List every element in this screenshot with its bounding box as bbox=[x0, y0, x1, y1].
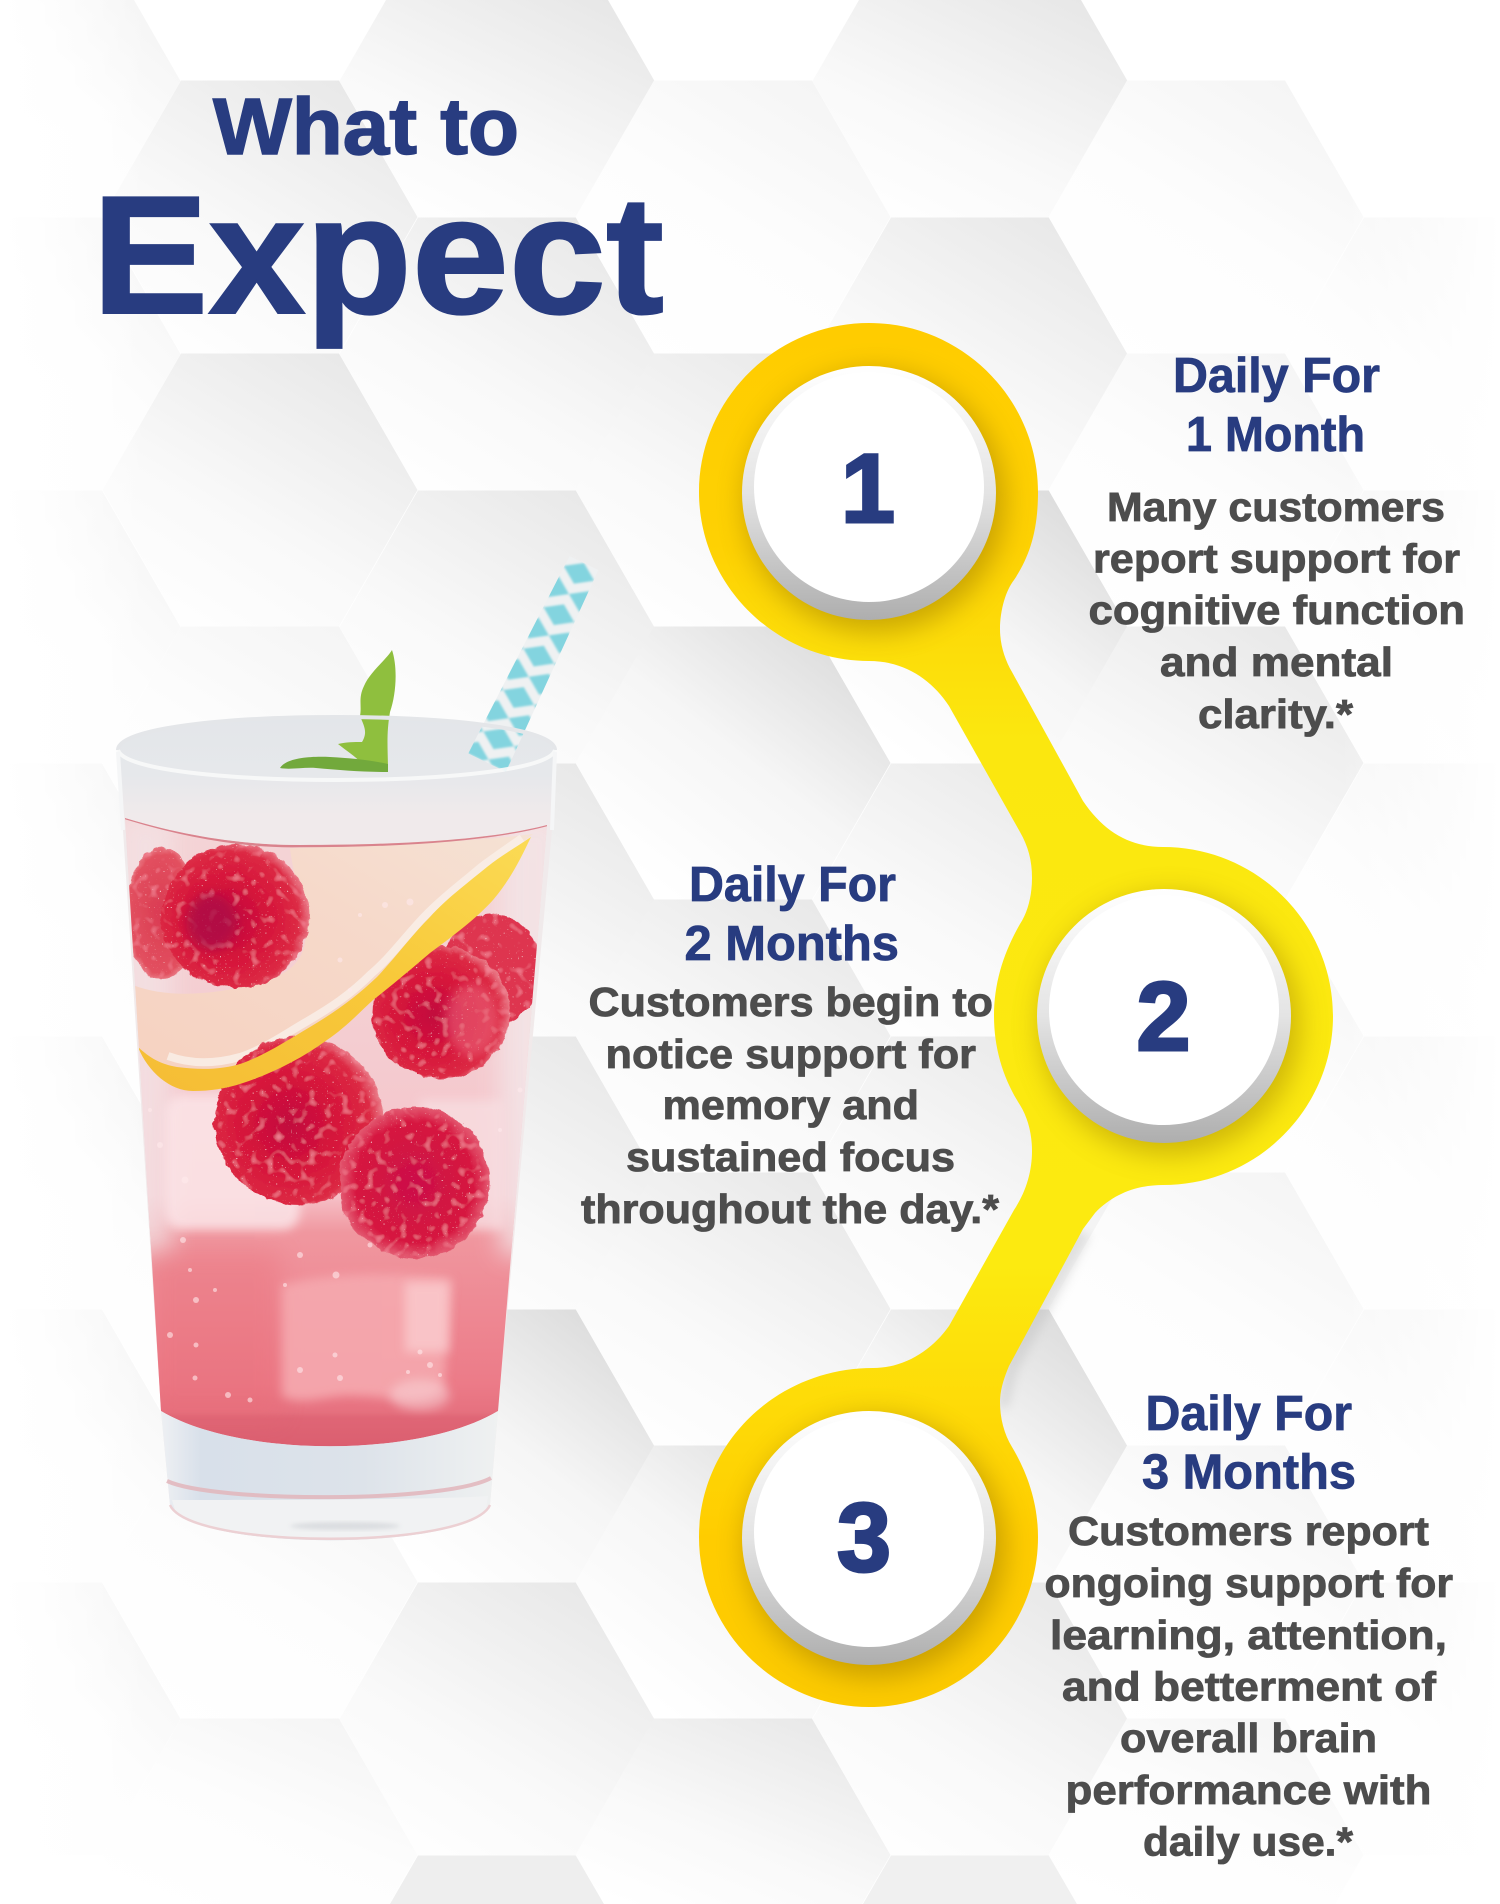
raspberry: back left bbox=[129, 846, 186, 980]
body text: performance with bbox=[1066, 1767, 1432, 1813]
heading bbox=[684, 857, 899, 971]
body text: and mental bbox=[1160, 639, 1393, 685]
heading: 2 Months bbox=[684, 916, 899, 971]
number 2: 2 bbox=[1137, 962, 1190, 1071]
timeline shape bbox=[699, 323, 1333, 1707]
icon: paper straw bbox=[468, 562, 594, 772]
body text bbox=[1044, 1508, 1453, 1864]
body text: overall brain bbox=[1120, 1715, 1377, 1761]
text block: daily for 3 months bbox=[1044, 1386, 1453, 1864]
ring shadow bbox=[745, 1417, 1005, 1677]
body text: Many customers bbox=[1107, 484, 1445, 530]
heading: 3 Months bbox=[1142, 1444, 1356, 1500]
body text: notice support for bbox=[606, 1031, 976, 1077]
glass body bbox=[118, 717, 555, 1540]
lemon rind bbox=[138, 837, 531, 1091]
heading: Daily For bbox=[1173, 348, 1380, 403]
text block: daily for 2 months bbox=[581, 857, 999, 1232]
glass of raspberry lemon drink bbox=[118, 553, 604, 1540]
number 3: 3 bbox=[837, 1483, 891, 1592]
body text: Customers begin to bbox=[588, 979, 993, 1025]
title bbox=[92, 82, 664, 349]
glass base bbox=[161, 1411, 498, 1540]
text block: daily for 1 month bbox=[1088, 348, 1465, 737]
number 1: 1 bbox=[841, 434, 895, 543]
body text: ongoing support for bbox=[1044, 1560, 1453, 1606]
ring bbox=[1037, 889, 1291, 1143]
lemon pith highlight bbox=[168, 838, 522, 1062]
raspberry: right back bbox=[446, 914, 537, 1023]
body text bbox=[1088, 484, 1465, 737]
disc bbox=[754, 1417, 984, 1647]
disc bbox=[1049, 895, 1279, 1125]
top lemon slice and ice bbox=[481, 838, 486, 839]
body text: report support for bbox=[1093, 536, 1460, 582]
liquid bbox=[125, 818, 547, 1446]
icon: mint leaves bbox=[280, 650, 396, 772]
disc bbox=[754, 372, 984, 602]
glass front rim bbox=[118, 750, 555, 780]
body text: daily use.* bbox=[1143, 1818, 1353, 1864]
title line: What to: What to bbox=[213, 82, 519, 171]
yellow timeline connector bbox=[699, 323, 1333, 1707]
body text: throughout the day.* bbox=[581, 1186, 999, 1232]
timeline shadow bbox=[998, 1216, 1091, 1408]
title line: Expect: Expect bbox=[92, 161, 664, 349]
heading bbox=[1142, 1386, 1356, 1500]
step 1 badge bbox=[742, 366, 1005, 632]
body text: cognitive function bbox=[1088, 587, 1465, 633]
heading: Daily For bbox=[1146, 1386, 1352, 1441]
raspberry: center bbox=[213, 1035, 381, 1203]
raspberry: right bbox=[370, 945, 508, 1077]
body text: Customers report bbox=[1068, 1508, 1429, 1554]
step 3 badge bbox=[742, 1411, 1005, 1677]
body text bbox=[581, 979, 999, 1232]
heading bbox=[1173, 348, 1380, 462]
ring bbox=[742, 366, 996, 620]
glass rim bbox=[118, 717, 555, 750]
raspberry: top bbox=[160, 843, 308, 987]
liquid contents bbox=[118, 789, 565, 1455]
body text: memory and bbox=[662, 1082, 919, 1128]
body text: sustained focus bbox=[626, 1134, 955, 1180]
ring bbox=[742, 1411, 996, 1665]
ring shadow bbox=[1040, 895, 1300, 1155]
lemon flesh bbox=[133, 834, 533, 1069]
step 2 badge bbox=[1037, 889, 1300, 1155]
body text: clarity.* bbox=[1198, 691, 1353, 737]
lower ice cube bbox=[282, 1274, 452, 1401]
ring shadow bbox=[745, 372, 1005, 632]
bubbles bbox=[158, 898, 502, 1402]
heading: 1 Month bbox=[1186, 407, 1365, 462]
heading: Daily For bbox=[689, 857, 896, 912]
body text: and betterment of bbox=[1062, 1664, 1436, 1710]
raspberry: bottom bbox=[338, 1105, 488, 1257]
body text: learning, attention, bbox=[1050, 1612, 1447, 1658]
